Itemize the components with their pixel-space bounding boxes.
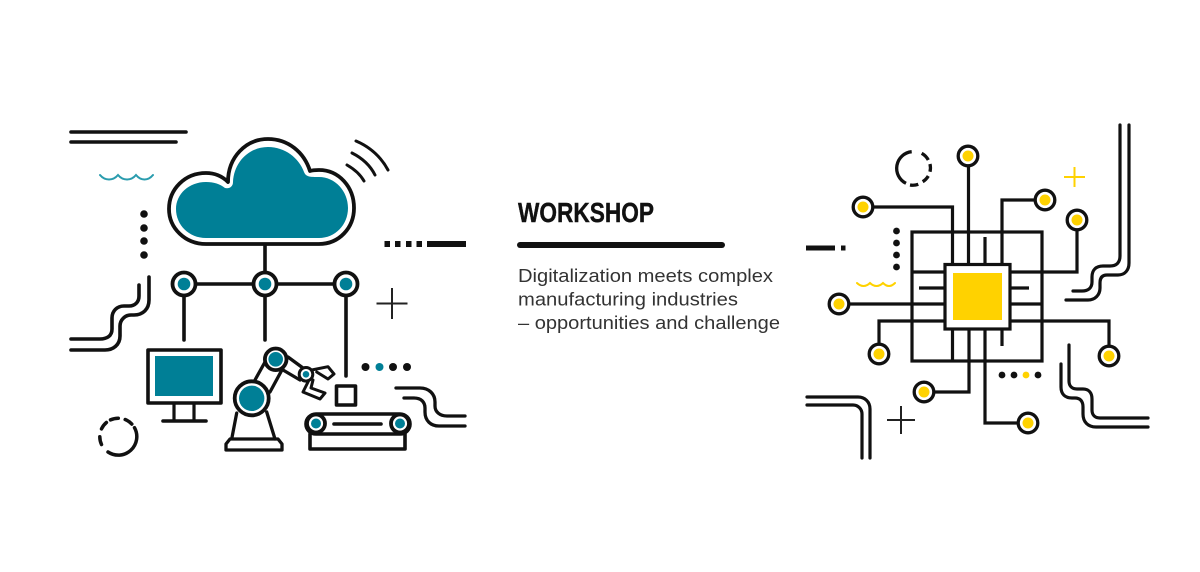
box on conveyor [336, 386, 356, 405]
stair lines left [71, 277, 149, 350]
plus sign [887, 406, 915, 434]
plus sign [376, 288, 408, 319]
network nodes [172, 272, 358, 296]
dash marks [806, 246, 846, 250]
panel: cloud manufacturing illustration [71, 132, 466, 455]
dashed line right of cloud [384, 241, 466, 247]
vertical dots [893, 228, 900, 270]
yellow plus [1064, 167, 1085, 187]
description: – opportunities and challenge [518, 312, 780, 333]
yellow wave [857, 283, 895, 286]
circuit nodes [829, 146, 1119, 433]
teal wave [100, 175, 153, 180]
curved lines right [396, 388, 465, 426]
top double lines [71, 132, 186, 142]
description: Digitalization meets complex [518, 265, 774, 286]
network lines [184, 245, 346, 376]
dashed circle [897, 152, 930, 185]
icon: monitor [148, 350, 221, 421]
circuit board lines [850, 167, 1109, 423]
corner lines bottom left [807, 397, 870, 458]
divider bar [517, 242, 725, 248]
icon: microchip [945, 264, 1010, 329]
conveyor belt [306, 414, 410, 449]
dashed circle [100, 418, 137, 455]
panel: chip circuit illustration [806, 125, 1148, 458]
icon: wifi arcs [347, 141, 388, 181]
description: manufacturing industries [518, 288, 738, 310]
text block: workshop [517, 197, 780, 333]
horizontal dots [999, 372, 1041, 378]
icon: cloud [169, 139, 354, 244]
heading: WORKSHOP [518, 197, 654, 228]
vertical dots [140, 210, 148, 259]
icon: robot arm [226, 348, 334, 450]
horizontal dots [362, 363, 411, 371]
squiggle lines bottom right [1061, 345, 1148, 427]
stair lines top right [1066, 125, 1129, 300]
